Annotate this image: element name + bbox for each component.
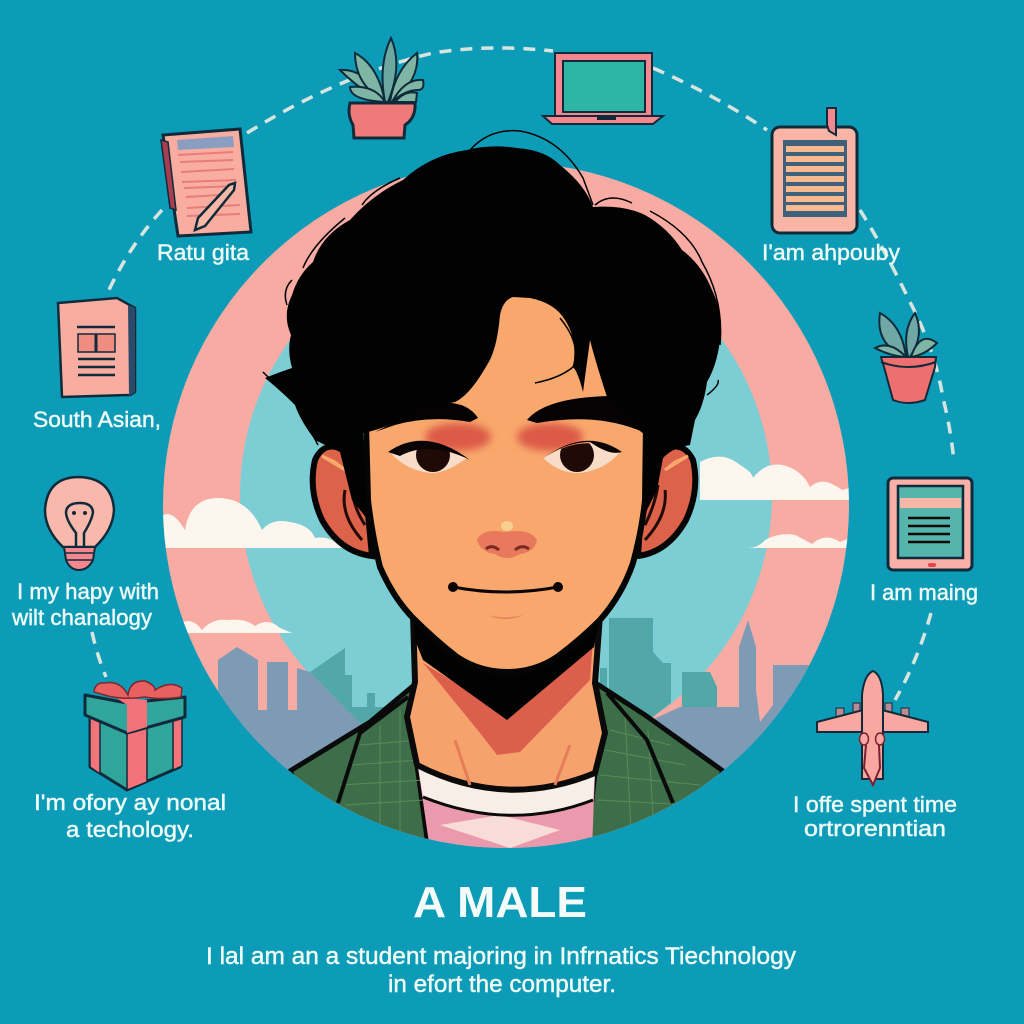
icon: airplane (817, 671, 928, 785)
icon: notepad and pen (161, 129, 251, 236)
label: technology happiness (11, 579, 159, 630)
label: I am maing: I am maing (870, 580, 978, 605)
jacket (290, 684, 723, 860)
title: A MALE (413, 878, 587, 927)
icon: tablet document (772, 108, 857, 233)
icon: book South Asian (58, 298, 135, 397)
brow shading (425, 423, 491, 451)
t-shirt (418, 767, 595, 850)
icon: potted plant right (875, 313, 937, 403)
label: gift note: a techology. (66, 817, 194, 842)
face (362, 270, 648, 672)
hair (265, 146, 721, 520)
description: I lal am an a student majoring in Infrnatics Tiechnology (206, 943, 796, 970)
skyline: teal buildings (600, 618, 717, 718)
label: time note (793, 792, 957, 841)
description (206, 943, 796, 998)
label: South Asian: South Asian, (33, 407, 161, 432)
icon: gift box (85, 681, 185, 790)
description: in efort the computer. (388, 971, 616, 998)
clouds (163, 457, 850, 633)
nose (477, 521, 537, 558)
right ear (638, 447, 695, 556)
label: gift note (34, 790, 226, 842)
icon: potted plant top (340, 38, 423, 138)
icon: light bulb (45, 477, 114, 570)
left ear (313, 447, 372, 556)
label: technology happiness: I my hapy with (17, 579, 159, 604)
label: time note: ortrorenntian (804, 816, 946, 841)
neck shadow (423, 640, 593, 755)
label: technology happiness: wilt chanalogy (11, 605, 152, 630)
right eye (541, 438, 622, 473)
inner sky (240, 338, 772, 716)
skyline: blue grey buildings and hills (218, 620, 850, 800)
left eye (388, 438, 470, 473)
icon: laptop (543, 53, 663, 124)
label: time note: I offe spent time (793, 792, 957, 817)
label: Ratu gita: Ratu gita (157, 240, 250, 265)
eyebrows (375, 396, 645, 433)
neck (407, 615, 605, 790)
label: gift note: I'm ofory ay nonal (34, 790, 226, 815)
label: I'am ahpouby: I'am ahpouby (762, 240, 900, 265)
mouth (448, 582, 563, 619)
icon: tablet right (888, 478, 972, 570)
hair wisps (263, 131, 721, 445)
portrait background circle (163, 162, 850, 848)
portrait (263, 131, 723, 860)
